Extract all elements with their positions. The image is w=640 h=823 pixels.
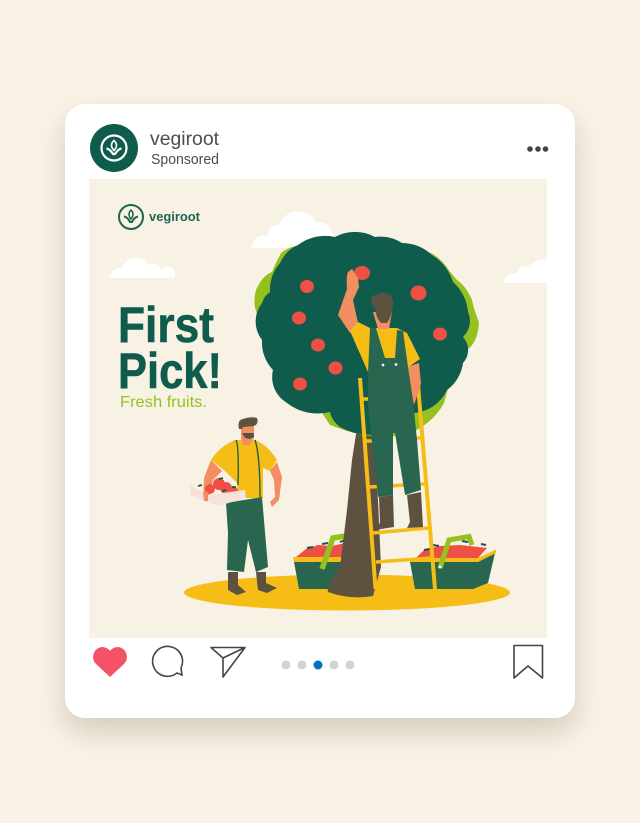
tree (254, 232, 479, 597)
shirt (211, 440, 277, 498)
account name: vegiroot (150, 129, 220, 150)
cloud: top behind tree (252, 212, 345, 248)
head (241, 426, 254, 445)
brand logo: vegiroot (149, 209, 201, 224)
ladder (360, 378, 435, 589)
icon: send (211, 648, 245, 677)
shirt (350, 322, 420, 372)
headline: Pick! (118, 343, 222, 399)
sponsored label: Sponsored (151, 152, 219, 168)
icon: more menu (527, 146, 548, 152)
tree canopy (256, 232, 470, 435)
tree trunk (328, 428, 381, 597)
hair (371, 293, 393, 323)
hair and beard (238, 417, 258, 439)
overall buttons (382, 363, 397, 366)
man on ladder (338, 269, 423, 530)
icon: comment (153, 646, 183, 676)
brand logo (119, 205, 201, 229)
avatar logo (90, 124, 138, 172)
neck (373, 312, 392, 329)
boots (375, 492, 423, 530)
basket: right (410, 536, 496, 589)
carousel dots (282, 660, 354, 670)
raised arm (338, 269, 359, 333)
icon: heart (93, 647, 127, 677)
headline (118, 297, 222, 399)
boots (228, 572, 277, 595)
hand on crate (203, 492, 208, 501)
apples on tree (292, 266, 447, 390)
tagline: Fresh fruits. (120, 394, 207, 411)
panel: post image (89, 179, 547, 638)
basket: left (293, 535, 360, 589)
cloud: right (504, 259, 547, 283)
man with crate (190, 417, 282, 595)
headline: First (118, 297, 214, 353)
icon: bookmark (514, 646, 542, 678)
cloud: left (110, 258, 175, 278)
lower arm (407, 363, 421, 405)
panel: post card (65, 104, 575, 718)
crate apples (205, 478, 238, 495)
trousers (226, 497, 268, 572)
crate (190, 485, 246, 506)
arms (203, 460, 282, 507)
ground shadow (184, 574, 510, 610)
suspenders (236, 440, 260, 497)
overalls (368, 328, 421, 497)
tree foliage back (254, 245, 479, 437)
